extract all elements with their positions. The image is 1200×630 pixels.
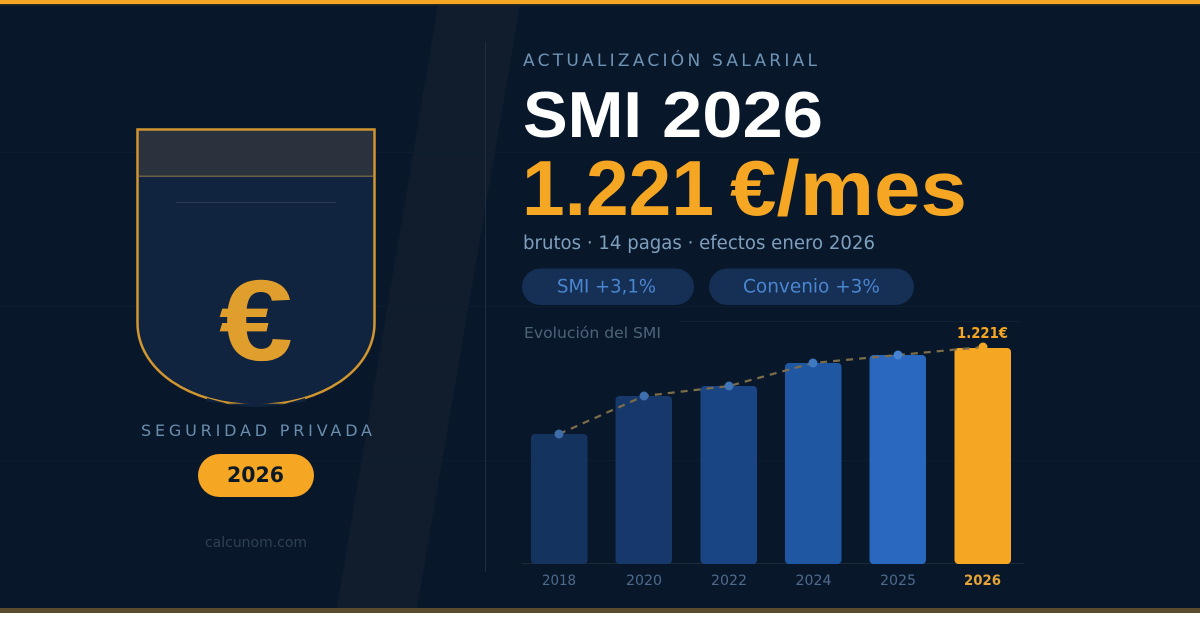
bar 2018 — [531, 434, 588, 564]
shield body — [138, 130, 374, 405]
headline amount — [522, 144, 967, 232]
pill: Convenio +3%: Convenio +3% — [743, 276, 880, 298]
website label: calcunom.com — [205, 535, 307, 551]
pill: SMI +3,1% — [522, 268, 694, 305]
bar 2020 — [616, 396, 672, 564]
title: 2026 — [662, 78, 823, 151]
year labels: 2026 — [964, 573, 1001, 589]
value label: 1.221€ — [957, 324, 1008, 342]
label: seguridad privada: SEGURIDAD PRIVADA — [141, 421, 372, 440]
year labels: 2020 — [626, 573, 662, 589]
pill: Convenio +3% — [709, 268, 914, 305]
trend line — [559, 347, 983, 434]
year labels: 2025 — [880, 573, 916, 589]
shield top band — [139, 131, 373, 176]
pill: SMI +3,1%: SMI +3,1% — [557, 276, 656, 298]
data points — [554, 342, 988, 438]
subtitle: brutos · 14 pagas · efectos enero 2026 — [523, 233, 875, 254]
bar 2022 — [700, 386, 757, 564]
bar 2025 — [870, 355, 926, 564]
headline amount: 1.221 — [522, 144, 714, 232]
headline amount: €/mes — [730, 144, 967, 232]
badge: 2026: 2026 — [227, 463, 284, 487]
panel: shield emblem — [138, 130, 374, 407]
year labels: 2018 — [542, 573, 576, 589]
eyebrow heading: ACTUALIZACIÓN SALARIAL — [523, 49, 818, 71]
bar chart: evolución del SMI — [522, 321, 1024, 589]
title: SMI — [523, 78, 642, 151]
title — [523, 78, 823, 151]
badge: 2026 — [198, 454, 314, 497]
icon: euro symbol: € — [219, 257, 293, 385]
year labels: 2022 — [711, 573, 747, 589]
bar 2024 — [785, 363, 842, 564]
year labels: 2024 — [796, 573, 832, 589]
year labels — [542, 573, 1001, 589]
bar 2026 — [954, 348, 1011, 564]
chart title: Evolución del SMI — [524, 324, 661, 342]
